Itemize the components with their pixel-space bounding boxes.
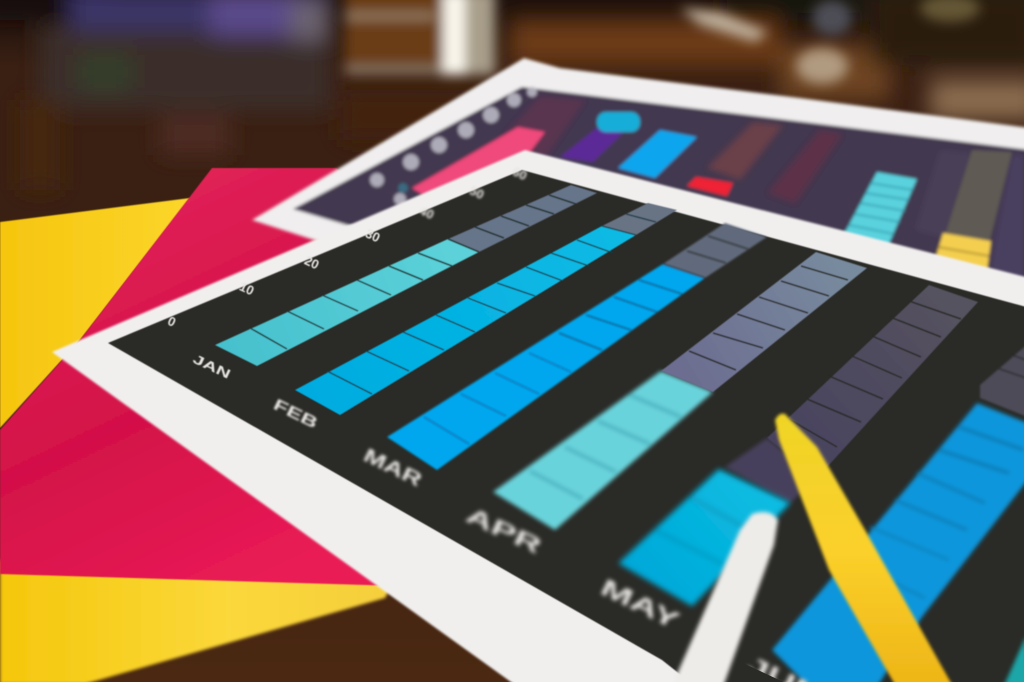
back sheet paper (252, 58, 1024, 300)
teal bar (843, 172, 917, 246)
axis labels: 50 (467, 183, 487, 202)
axis labels: 0 (165, 313, 178, 330)
bar: JUN (772, 403, 1024, 682)
month labels: MAY (596, 574, 683, 635)
axis labels: 60 (510, 164, 530, 183)
bar: APR (493, 252, 867, 530)
axis labels: 40 (417, 203, 437, 222)
back sheet print (293, 87, 1024, 285)
yellow bar (935, 233, 991, 271)
back sheet axis labels (370, 87, 537, 205)
front sheet black print (108, 170, 1024, 682)
bar: FEB (295, 203, 677, 415)
bar: JUL gray (980, 342, 1024, 418)
red paper (0, 168, 440, 586)
purple bar (560, 128, 623, 162)
bar: MAR (387, 223, 767, 470)
axis labels: 30 (363, 226, 383, 245)
yellow paper, top left (0, 198, 190, 428)
background colour stripes (495, 96, 1024, 280)
month labels: MAR (360, 445, 425, 492)
front sheet paper (52, 150, 1024, 682)
yellow pencil (775, 414, 955, 682)
bar: JUL teal corner (1002, 636, 1024, 682)
axis labels: 10 (237, 279, 257, 298)
yellow paper, bottom left (0, 560, 400, 682)
back sheet (252, 58, 1024, 300)
blue bar (618, 130, 697, 178)
axis labels: 20 (302, 253, 322, 272)
cyan pill (597, 112, 640, 132)
month labels: FEB (270, 396, 320, 432)
background mug and reflections (345, 0, 980, 84)
bar: MAY (620, 285, 978, 605)
bar: JAN (215, 185, 597, 366)
olive bar (945, 150, 1012, 240)
pink bar (412, 127, 545, 196)
axis labels (165, 164, 530, 330)
white marker (670, 512, 778, 682)
month labels (190, 351, 826, 682)
month labels: APR (462, 502, 545, 559)
month labels: JAN (190, 351, 233, 382)
red bar (687, 177, 733, 196)
